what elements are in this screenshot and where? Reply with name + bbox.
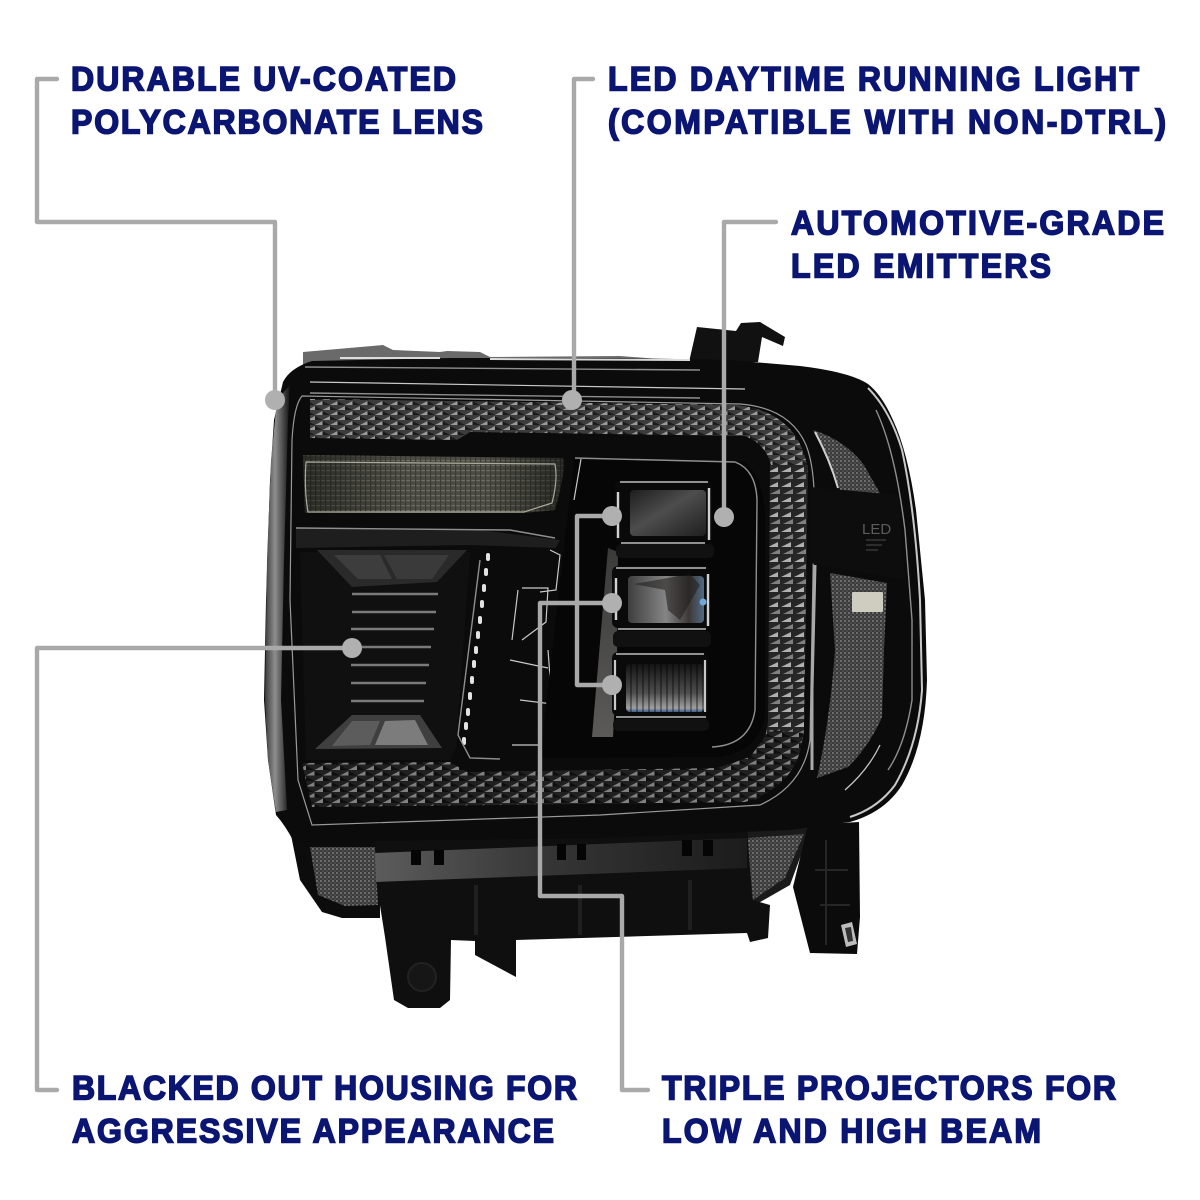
projector: middle: [612, 566, 711, 647]
upper left trim: [317, 550, 467, 587]
top white highlight: [340, 358, 690, 360]
callout: triple projectors: LOW AND HIGH BEAM: [662, 1112, 1041, 1151]
callout: LED emitters: [714, 204, 1164, 527]
lower mounting block: [375, 825, 770, 1008]
callout: daytime running light: [562, 60, 1166, 410]
left section panel: [300, 552, 470, 760]
block ribs: [476, 880, 690, 935]
main black body: [264, 358, 927, 842]
projector: bottom: [612, 652, 709, 731]
callout: UV-coated lens: [37, 60, 483, 410]
top bezel lines: [310, 382, 745, 389]
right clear edge: [850, 388, 922, 817]
side marker LED tab: LED: [862, 521, 891, 538]
left clear edge: [265, 385, 290, 812]
callout: blacked out housing: BLACKED OUT HOUSING FOR: [72, 1069, 577, 1108]
callout: UV-coated lens: DURABLE UV-COATED: [71, 60, 456, 99]
callout: triple projectors: [540, 506, 1116, 1151]
mesh band: top: [310, 399, 808, 470]
callout: UV-coated lens: POLYCARBONATE LENS: [71, 103, 483, 142]
headlight assembly: [264, 322, 927, 1008]
left foot hole: [408, 963, 436, 991]
right mounting bracket: [793, 822, 860, 954]
side marker LED tab: [810, 487, 905, 580]
block slots: [411, 840, 713, 865]
callout: LED emitters: LED EMITTERS: [791, 247, 1051, 286]
callout: LED emitters: AUTOMOTIVE-GRADE: [791, 204, 1164, 243]
projector: top: [615, 480, 714, 558]
callout: triple projectors: TRIPLE PROJECTORS FOR: [662, 1069, 1116, 1108]
projector surround: [540, 460, 765, 758]
block highlight band: [375, 838, 747, 882]
inner bracket details: [510, 588, 560, 745]
projector grey wedge: [592, 548, 618, 737]
lower side marker lens: [817, 573, 887, 778]
upper side marker lens: [813, 430, 882, 497]
mesh band: bottom: [302, 730, 803, 807]
DRL light bar: [303, 455, 564, 513]
top mounting clip: [689, 322, 785, 362]
top left metal flap: [303, 345, 700, 372]
fins: [351, 594, 438, 701]
lens frame outline: [290, 396, 814, 825]
callout: daytime running light: LED DAYTIME RUNNING LIGHT: [608, 60, 1139, 99]
lower left reflector housing: [290, 830, 380, 918]
mesh band: right: [720, 465, 808, 800]
callout: blacked out housing: AGGRESSIVE APPEARANCE: [72, 1112, 554, 1151]
callout: daytime running light: (COMPATIBLE WITH NON-DTRL): [608, 103, 1166, 142]
lower right reflector housing: [745, 825, 812, 905]
callout: blacked out housing: [37, 638, 577, 1151]
LED strip dots: [462, 553, 490, 745]
lower left trim: [315, 715, 442, 749]
